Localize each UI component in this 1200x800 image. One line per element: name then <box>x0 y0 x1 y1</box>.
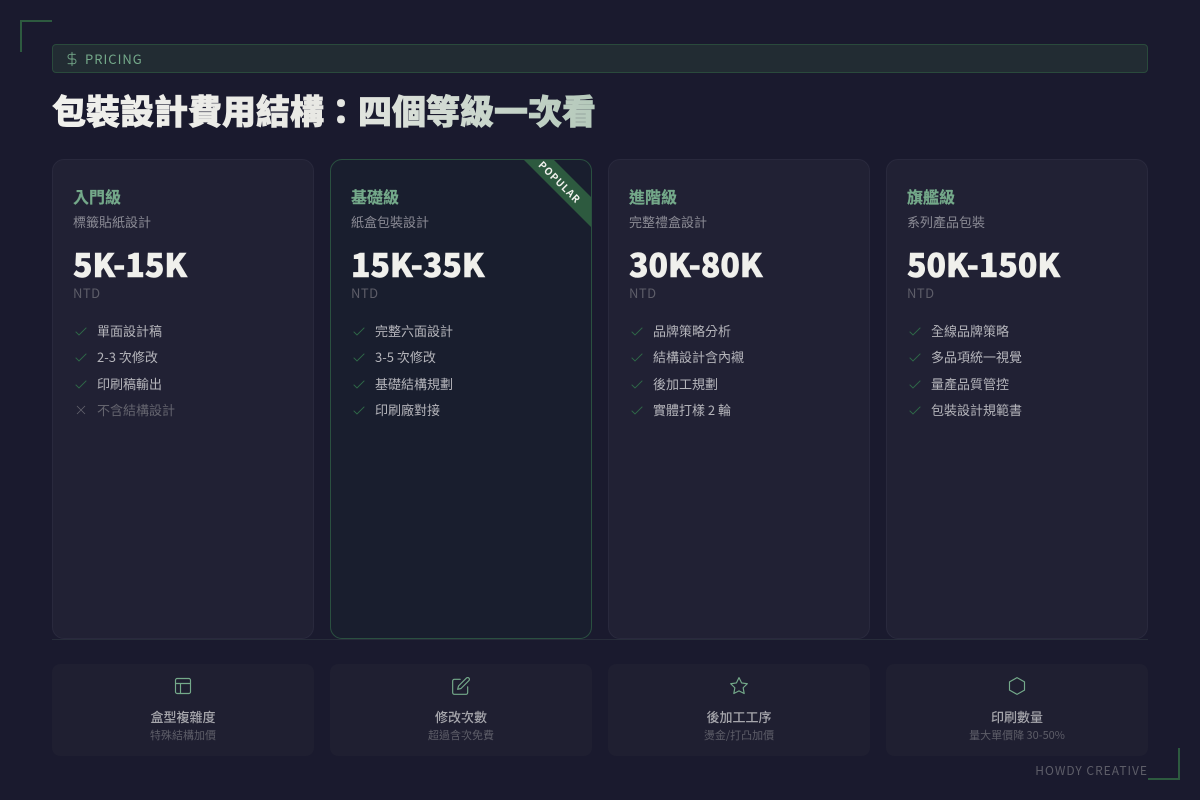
panel: tier 旗艦級 <box>886 159 1148 639</box>
tier name: 基礎級 <box>351 184 399 208</box>
tier subtitle: 標籤貼紙設計 <box>73 212 151 231</box>
feature: 單面設計稿: 單面設計稿 <box>97 321 162 340</box>
factor name: 印刷數量 <box>991 707 1043 726</box>
feature: 基礎結構規劃: 基礎結構規劃 <box>375 374 453 393</box>
factor name: 盒型複雜度 <box>150 707 216 726</box>
feature: 後加工規劃: 後加工規劃 <box>653 374 718 393</box>
icon: layout <box>174 678 192 694</box>
currency: NTD <box>907 283 935 302</box>
feature: 完整六面設計: 完整六面設計 <box>375 321 453 340</box>
feature: 多品項統一視覺: 多品項統一視覺 <box>931 347 1022 366</box>
factor name: 後加工工序 <box>706 707 772 726</box>
price: 50K-150K <box>907 241 1060 287</box>
panel: tier 進階級 <box>608 159 870 639</box>
tier name: 旗艦級 <box>907 184 955 208</box>
price: 5K-15K <box>73 241 187 287</box>
feature: 包裝設計規範書: 包裝設計規範書 <box>931 400 1022 419</box>
panel: tier 基礎級 (popular) <box>330 159 592 639</box>
factor note: 超過含次免費 <box>428 727 494 743</box>
currency: NTD <box>351 283 379 302</box>
feature: 品牌策略分析: 品牌策略分析 <box>653 321 731 340</box>
factor note: 燙金/打凸加價 <box>704 727 774 743</box>
corner bracket: top left <box>20 20 52 52</box>
feature: 3-5 次修改: 3-5 次修改 <box>375 347 436 366</box>
panel: factor 印刷數量 <box>886 664 1148 756</box>
panel: factor 修改次數 <box>330 664 592 756</box>
price: 30K-80K <box>629 241 763 287</box>
factor name: 修改次數 <box>435 707 487 726</box>
footer brand: HOWDY CREATIVE <box>1035 762 1148 779</box>
popular ribbon <box>524 159 591 227</box>
tier subtitle: 完整禮盒設計 <box>629 212 707 231</box>
feature: 印刷廠對接: 印刷廠對接 <box>375 400 440 419</box>
price: 15K-35K <box>351 241 485 287</box>
icon: dollar sign <box>68 52 76 66</box>
feature: 印刷稿輸出: 印刷稿輸出 <box>97 374 162 393</box>
feature: 量產品質管控: 量產品質管控 <box>931 374 1009 393</box>
feature: 實體打樣 2 輪: 實體打樣 2 輪 <box>653 400 731 419</box>
tier subtitle: 紙盒包裝設計 <box>351 212 429 231</box>
icon: edit <box>452 677 470 695</box>
icon: star <box>730 677 748 694</box>
factor note: 特殊結構加價 <box>150 727 216 743</box>
panel: factor 後加工工序 <box>608 664 870 756</box>
feature: 結構設計含內襯: 結構設計含內襯 <box>653 347 744 366</box>
section tag bar: pricing <box>52 44 1148 73</box>
factor note: 量大單價降 30-50% <box>969 727 1065 743</box>
tag label: PRICING <box>85 49 143 68</box>
title: 包裝設計費用結構：四個等級一次看 <box>52 85 596 134</box>
tier name: 進階級 <box>629 184 677 208</box>
tier name: 入門級 <box>73 184 121 208</box>
currency: NTD <box>629 283 657 302</box>
feature: 2-3 次修改: 2-3 次修改 <box>97 347 158 366</box>
currency: NTD <box>73 283 101 302</box>
tier subtitle: 系列產品包裝 <box>907 212 985 231</box>
feature excluded: 不含結構設計: 不含結構設計 <box>97 400 175 419</box>
feature: 全線品牌策略: 全線品牌策略 <box>931 321 1009 340</box>
panel: factor 盒型複雜度 <box>52 664 314 756</box>
corner bracket: bottom right <box>1148 748 1180 780</box>
icon: hexagon <box>1008 677 1026 695</box>
panel: tier 入門級 <box>52 159 314 639</box>
